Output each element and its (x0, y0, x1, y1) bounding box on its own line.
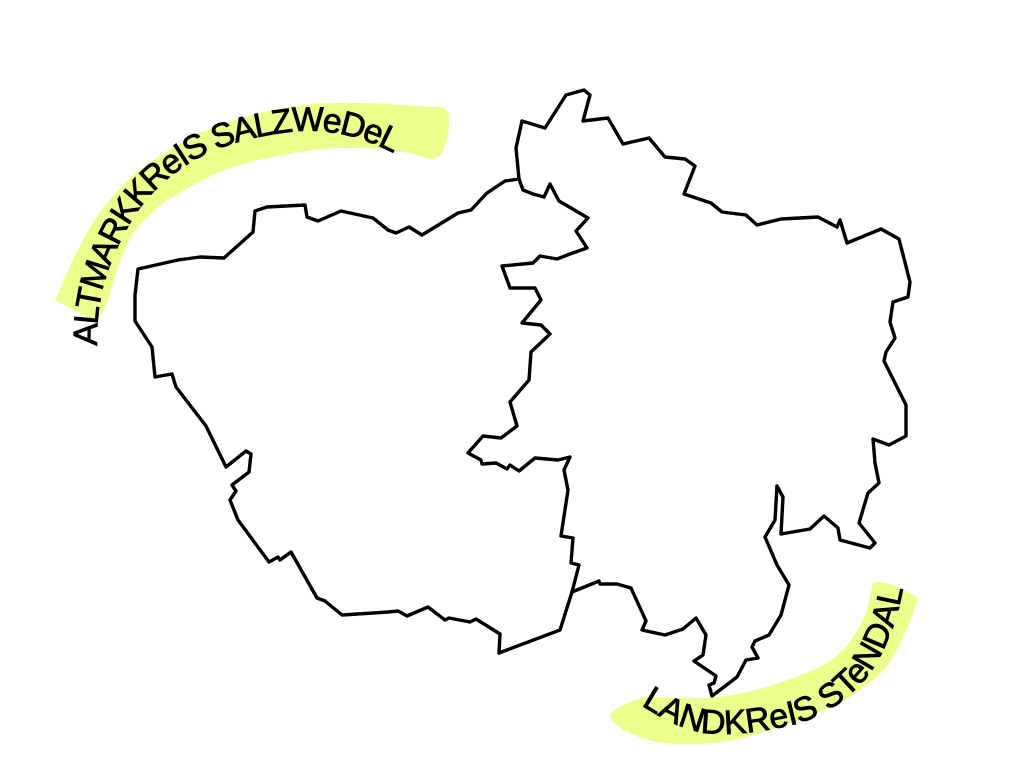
label: Altmarkkreis Salzwedel: ALTMARKKReIS SALZWeDeL (73, 107, 395, 346)
highlight: Stendal label band (610, 582, 918, 744)
map: shared district border (468, 179, 588, 592)
map: Landkreis Stendal district outline (516, 90, 910, 696)
label: Landkreis Stendal: LANDKReIS STeNDAL (642, 588, 904, 734)
highlight: Salzwedel label band (55, 103, 449, 320)
map: Altmarkkreis Salzwedel district outline (135, 179, 572, 653)
